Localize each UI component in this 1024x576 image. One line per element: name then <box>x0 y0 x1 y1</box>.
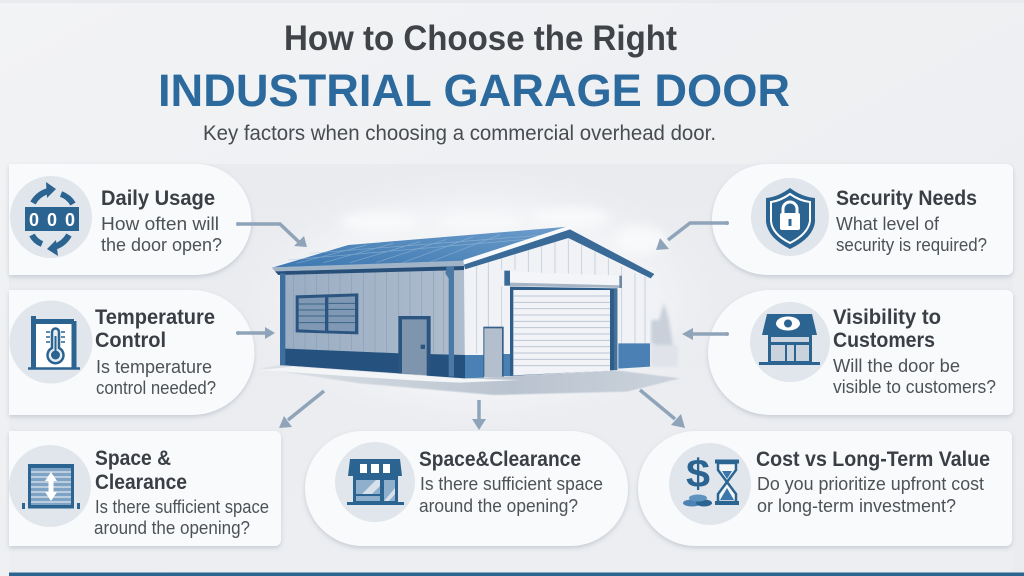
title line 2: INDUSTRIAL GARAGE DOOR <box>158 65 790 116</box>
left wall <box>280 265 465 378</box>
heading: space and clearance: Space & <box>95 447 171 470</box>
text: space question: Is there sufficient space <box>95 497 269 517</box>
heading: visibility to customers: Customers <box>833 329 935 352</box>
text: cost question: or long-term investment? <box>757 496 956 516</box>
text: daily usage question: the door open? <box>101 235 222 255</box>
arrow: cost vs value <box>640 390 685 428</box>
left wall dark base band <box>280 348 465 378</box>
text: space question: around the opening? <box>419 496 578 516</box>
text: daily usage question: How often will <box>101 214 219 234</box>
icon: storefront <box>335 442 415 522</box>
side door <box>398 316 431 375</box>
icon: dollar and hourglass: $ <box>686 452 710 496</box>
subtitle: Key factors when choosing a commercial overhead door. <box>203 121 716 145</box>
gable trim <box>463 226 654 278</box>
text: temperature question: control needed? <box>96 378 216 398</box>
arrow: space and clearance middle <box>472 400 486 430</box>
text: security question: security is required? <box>836 235 987 255</box>
icon: shield with padlock <box>751 178 829 256</box>
panel: security needs <box>712 164 1013 275</box>
text: security question: What level of <box>836 214 940 234</box>
panel: visibility to customers <box>708 290 1013 415</box>
illustration: industrial building <box>260 226 680 395</box>
footer bar <box>9 572 1024 576</box>
icon: door with vertical arrow <box>9 445 91 527</box>
text: visibility question: Will the door be <box>833 356 960 376</box>
icon: storefront with eye <box>750 302 830 382</box>
arrow: daily usage <box>236 222 307 247</box>
heading: security needs: Security Needs <box>836 187 977 210</box>
ground shadow <box>260 365 680 395</box>
panel: space and clearance middle <box>305 431 628 546</box>
text: cost question: Do you prioritize upfront cost <box>757 474 984 494</box>
heading: space and clearance: Clearance <box>95 471 187 494</box>
panel: temperature control <box>9 290 254 415</box>
icon: counter with cycle arrows: 000 <box>29 210 75 230</box>
text: space question: around the opening? <box>94 518 250 538</box>
title line 1: How to Choose the Right <box>284 19 677 58</box>
panel: cost vs long-term value <box>638 431 1012 546</box>
personnel door <box>483 327 504 377</box>
roof <box>273 227 568 267</box>
fascia and gutters <box>272 261 465 377</box>
icon: dollar and hourglass <box>669 443 751 525</box>
heading: space and clearance: Space&Clearance <box>419 448 581 471</box>
arrow: visibility to customers <box>682 328 729 340</box>
arrow: security needs <box>656 221 729 250</box>
right gable wall <box>465 236 650 378</box>
panel: space and clearance left <box>9 431 281 546</box>
text: space question: Is there sufficient space <box>420 474 603 494</box>
background clouds and tree <box>340 208 678 367</box>
heading: visibility to customers: Visibility to <box>833 306 941 329</box>
heading: temperature control: Control <box>95 329 166 352</box>
window <box>296 293 358 334</box>
panel: daily usage <box>9 164 251 275</box>
heading: daily usage: Daily Usage <box>101 187 215 210</box>
icon: counter with cycle arrows <box>10 176 92 258</box>
heading: temperature control: Temperature <box>95 306 215 329</box>
arrows <box>236 221 729 430</box>
arrow: temperature control <box>236 327 275 339</box>
roller door <box>510 287 617 376</box>
text: temperature question: Is temperature <box>96 357 212 377</box>
text: visibility question: visible to customers? <box>833 377 996 397</box>
icon: thermometer in frame <box>10 300 92 384</box>
door header box <box>504 271 622 288</box>
heading: cost vs long-term value: Cost vs Long-Term Value <box>756 448 990 471</box>
arrow: space and clearance left <box>279 391 324 428</box>
